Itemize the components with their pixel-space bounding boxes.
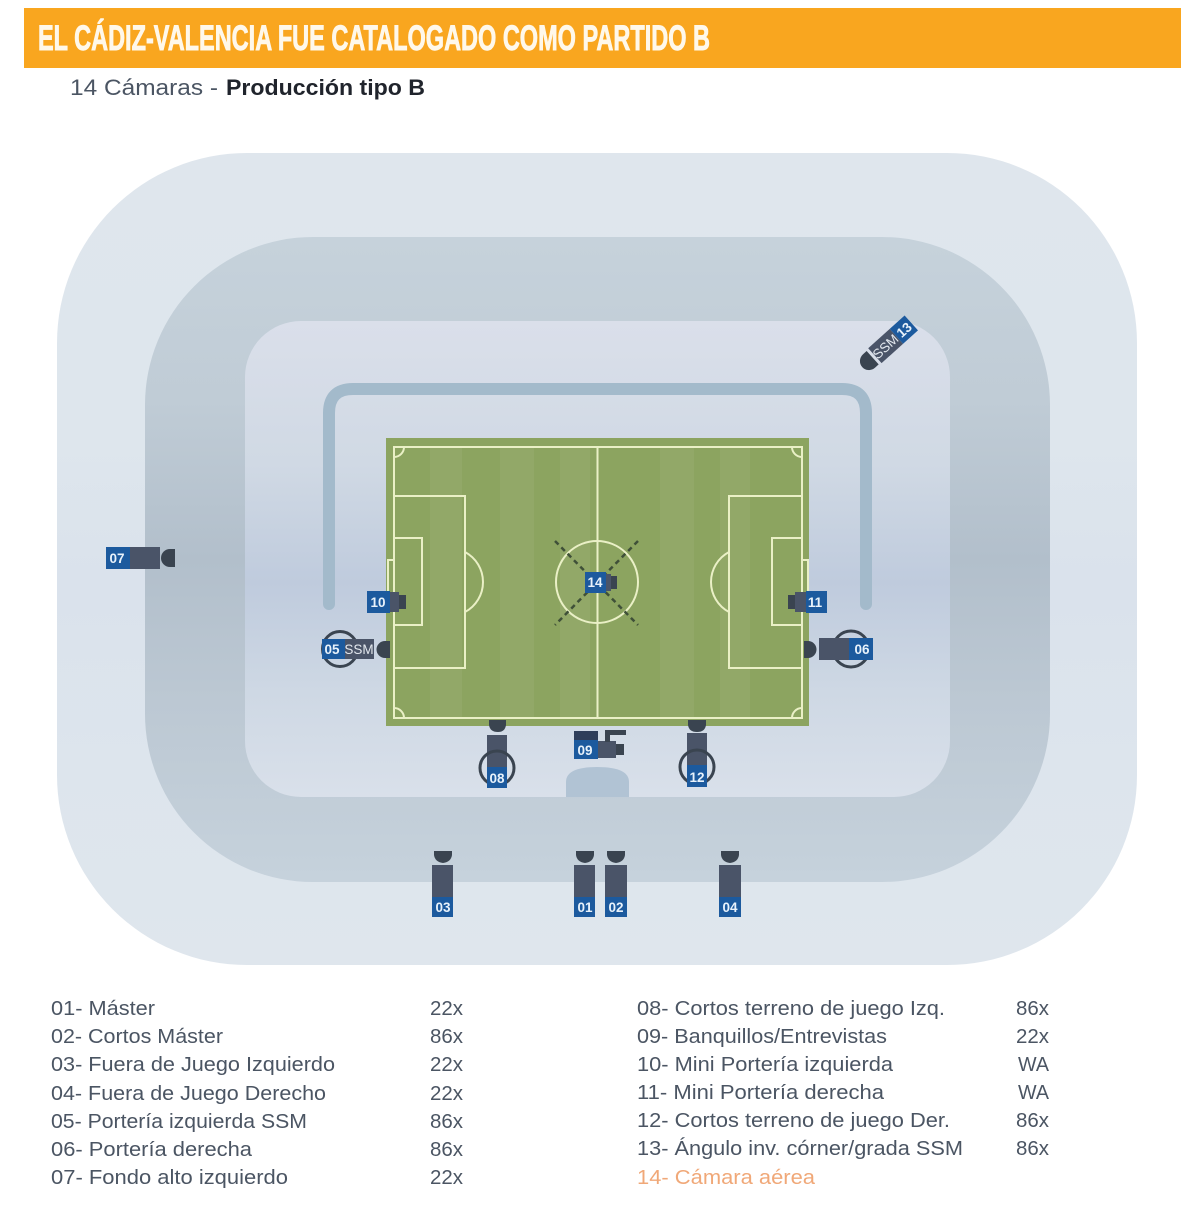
camera 08 [480,720,514,788]
legend: cameras 08 to 14: 11- Mini Portería derecha [637,1082,885,1104]
legend: cameras 01 to 07: 86x [430,1026,463,1048]
legend: cameras 01 to 07: 22x [430,1054,463,1076]
camera 10: 10 [370,595,386,610]
camera rail track [329,389,866,604]
camera 01: 01 [577,900,593,915]
camera 02: 02 [608,900,624,915]
camera 05 SSM [322,632,390,666]
camera 08: 08 [489,771,505,786]
camera 10 [367,591,406,613]
legend: cameras 01 to 07: 03- Fuera de Juego Izquierdo [51,1054,335,1076]
camera 12 [680,720,714,787]
camera 04: 04 [722,900,738,915]
camera 05 SSM: SSM [344,642,374,657]
tunnel [566,767,629,797]
camera 12: 12 [689,770,705,785]
camera 04 [719,851,741,917]
subtitle: 14 Cámaras - [70,75,218,100]
legend: cameras 08 to 14: 08- Cortos terreno de juego Izq. [637,998,945,1020]
legend: cameras 08 to 14: 22x [1016,1026,1049,1048]
camera 02 [605,851,627,917]
aerial camera coverage lines [555,541,638,625]
camera 11: 11 [808,595,823,610]
legend: cameras 01 to 07: 02- Cortos Máster [51,1026,223,1048]
legend: cameras 08 to 14: 12- Cortos terreno de juego Der. [637,1110,950,1132]
stadium inner ring [245,321,950,797]
legend: cameras 08 to 14: WA [1018,1054,1050,1076]
camera 13 SSM [856,315,918,375]
camera 01 [574,851,595,917]
stadium middle stand [145,237,1050,882]
legend: cameras 01 to 07: 22x [430,1167,463,1189]
legend: cameras 08 to 14: 86x [1016,1110,1049,1132]
subtitle: Producción tipo B [226,75,425,100]
stadium diagram [57,153,1137,965]
camera 06 [804,631,873,667]
legend: cameras 08 to 14: 09- Banquillos/Entrevistas [637,1026,887,1048]
legend: cameras 08 to 14: 13- Ángulo inv. córner/grada SSM [637,1137,963,1160]
legend: cameras 01 to 07: 22x [430,1083,463,1105]
legend: cameras 08 to 14: 86x [1016,1138,1049,1160]
camera 11 [788,591,827,613]
legend: cameras 01 to 07 [51,998,463,1189]
legend: cameras 01 to 07: 06- Portería derecha [51,1139,253,1161]
camera 09: 09 [577,743,593,758]
legend: cameras 01 to 07: 07- Fondo alto izquierdo [51,1167,288,1189]
legend: cameras 01 to 07: 86x [430,1111,463,1133]
legend: cameras 08 to 14: 86x [1016,998,1049,1020]
camera 05 SSM: 05 [324,642,340,657]
football pitch [386,438,809,726]
camera 13 SSM: 13 [894,319,915,341]
legend: cameras 01 to 07: 86x [430,1139,463,1161]
legend: cameras 08 to 14 [637,998,1050,1189]
legend: cameras 08 to 14: 10- Mini Portería izquierda [637,1054,894,1076]
title banner [24,8,1181,68]
camera 13 SSM: SSM [870,331,902,362]
camera 07: 07 [109,551,125,566]
legend: cameras 01 to 07: 05- Portería izquierda SSM [51,1111,307,1133]
title banner: EL CÁDIZ-VALENCIA FUE CATALOGADO COMO PARTIDO B [38,18,710,58]
legend: cameras 01 to 07: 01- Máster [51,998,155,1020]
camera 09 [574,730,626,759]
camera 07 [106,547,175,569]
camera 03 [432,851,453,917]
camera 14 [585,572,617,593]
camera 14: 14 [587,575,603,590]
camera 03: 03 [435,900,451,915]
legend: cameras 08 to 14: 14- Cámara aérea [637,1167,816,1189]
subtitle [70,75,425,100]
legend: cameras 01 to 07: 22x [430,998,463,1020]
stadium outer stand [57,153,1137,965]
legend: cameras 01 to 07: 04- Fuera de Juego Derecho [51,1083,326,1105]
legend: cameras 08 to 14: WA [1018,1082,1050,1104]
camera 06: 06 [854,642,870,657]
